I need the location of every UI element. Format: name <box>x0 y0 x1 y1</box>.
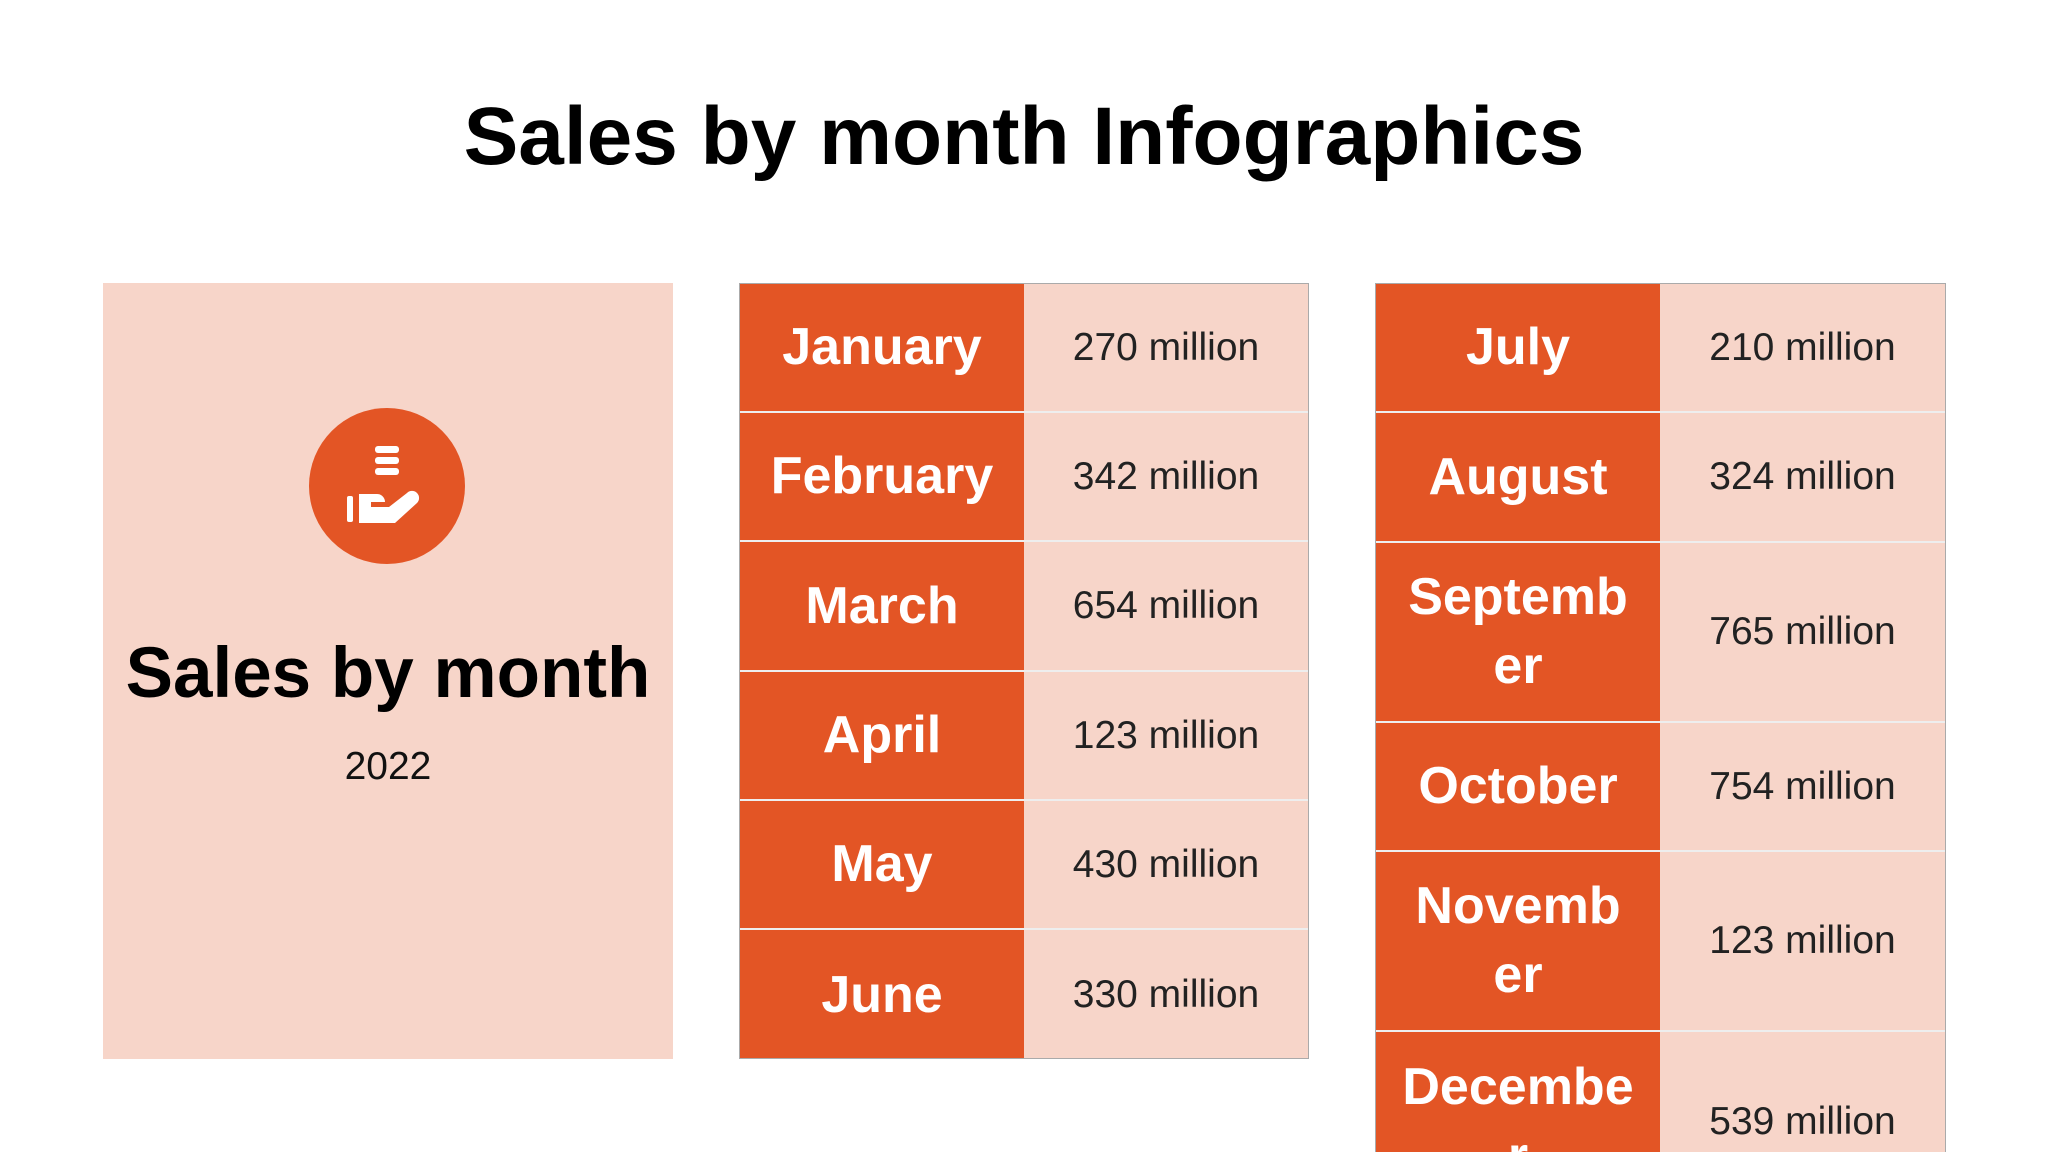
row: July: 210 million <box>1709 326 1896 368</box>
row: May <box>740 801 1308 930</box>
row: November: Novemb <box>1415 877 1621 935</box>
row: June: June <box>821 966 943 1024</box>
row: May: 430 million <box>1073 842 1259 886</box>
row: January: 270 million <box>1073 326 1259 368</box>
row: September: er <box>1493 637 1543 695</box>
row: April <box>740 672 1308 801</box>
table: July-December <box>1375 283 1946 1152</box>
row: October: 754 million <box>1709 764 1896 808</box>
row: September: Septemb <box>1408 568 1628 626</box>
row: December: Decembe <box>1402 1058 1634 1116</box>
row: October <box>1376 723 1945 852</box>
row: March: 654 million <box>1073 584 1259 627</box>
title: Sales by month Infographics <box>464 91 1584 182</box>
row: February <box>740 413 1308 542</box>
row: September: 765 million <box>1709 610 1896 653</box>
row: July: July <box>1466 318 1570 376</box>
row: April: 123 million <box>1073 714 1259 756</box>
row: February: 342 million <box>1073 454 1259 498</box>
row: January <box>740 284 1308 413</box>
row: July <box>1376 284 1945 413</box>
row: February: February <box>771 447 993 505</box>
icon: hand with coins <box>309 408 465 564</box>
row: September <box>1376 543 1945 723</box>
row: December <box>1376 1032 1896 1152</box>
row: March: March <box>805 576 959 634</box>
row: December: 539 million <box>1709 1100 1896 1143</box>
row: June: 330 million <box>1073 973 1259 1016</box>
row: November: er <box>1493 946 1543 1004</box>
panel: summary <box>103 283 673 1059</box>
row: August <box>1376 413 1945 543</box>
row: January: January <box>782 318 982 376</box>
row: April: April <box>823 706 941 764</box>
row: March <box>740 542 1308 672</box>
row: November <box>1376 852 1945 1032</box>
row: November: 123 million <box>1709 919 1896 962</box>
heading: sales by month: Sales by month <box>126 634 650 713</box>
table: January-June <box>739 283 1309 1059</box>
text: year: 2022 <box>345 745 431 788</box>
row: August: August <box>1428 448 1608 506</box>
row: June <box>740 930 1259 1058</box>
row: October: October <box>1418 757 1618 815</box>
row: May: May <box>831 835 933 893</box>
row: August: 324 million <box>1709 455 1896 498</box>
